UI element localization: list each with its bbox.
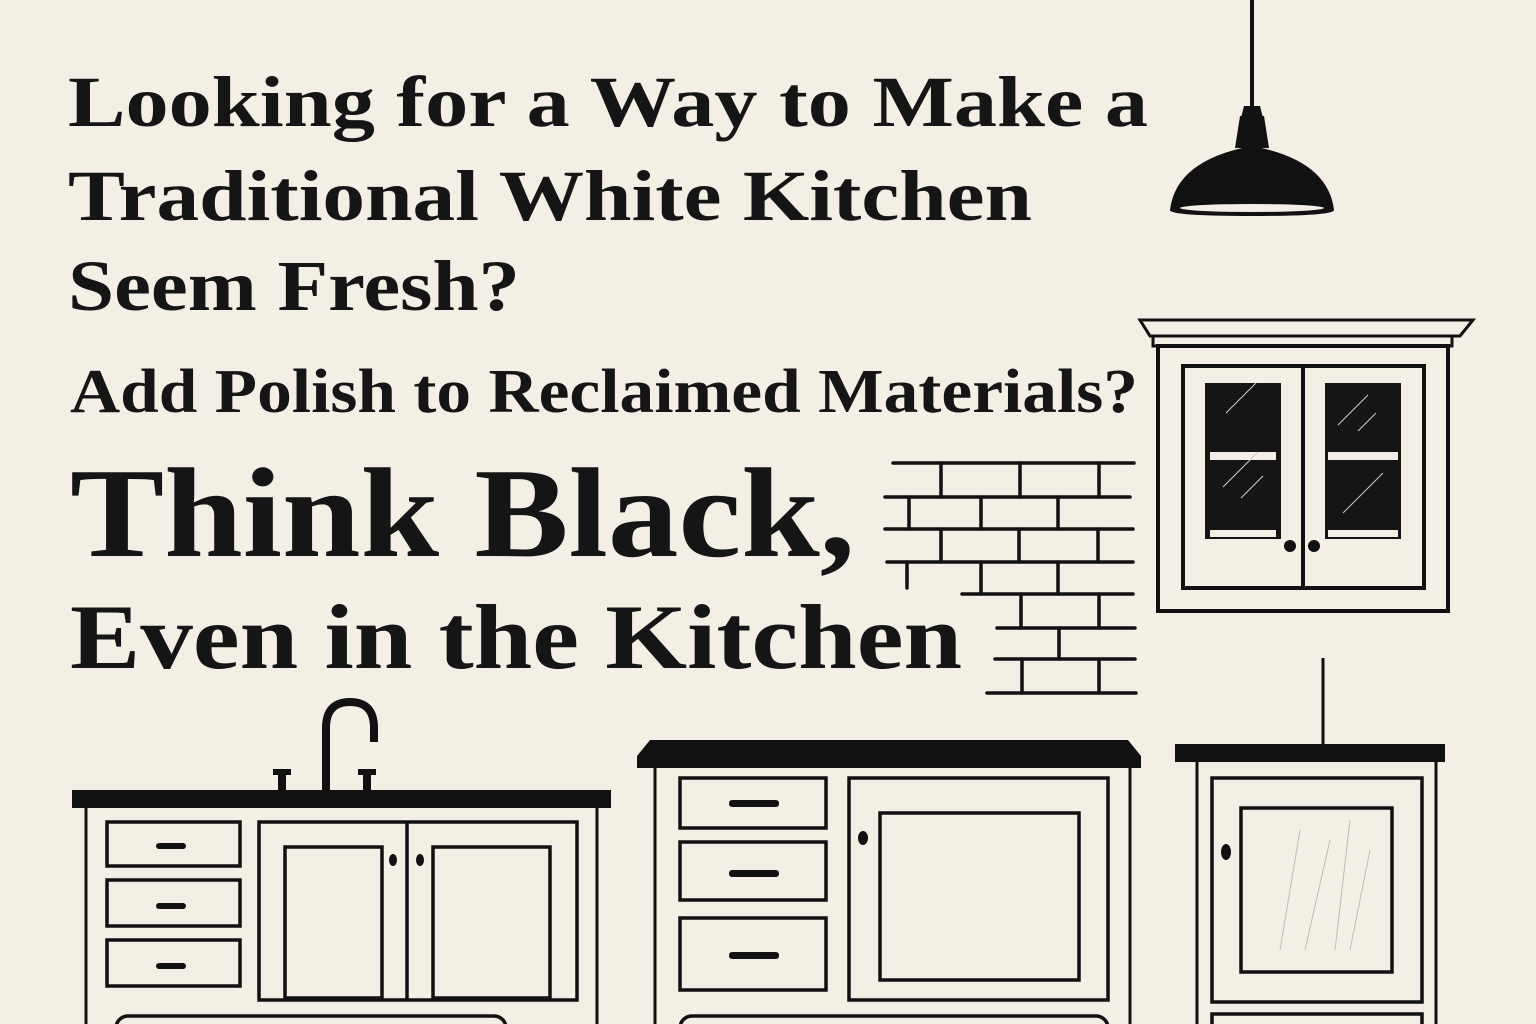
icon: brick wall [885,463,1136,693]
right cabinet [1175,658,1445,1024]
headline: Even in the Kitchen [70,586,962,688]
upper cabinet with glass doors [1140,320,1473,611]
icon: faucet [273,702,376,790]
middle cabinet [637,740,1141,1024]
subtitle: Add Polish to Reclaimed Materials? [70,358,1138,426]
title: Seem Fresh? [68,246,520,326]
icon: pendant lamp [1170,0,1334,216]
title: Looking for a Way to Make a [68,62,1148,142]
headline: Think Black, [70,442,855,584]
title: Traditional White Kitchen [68,156,1032,236]
headline [70,442,962,688]
title [68,62,1148,326]
sink cabinet [72,702,611,1024]
